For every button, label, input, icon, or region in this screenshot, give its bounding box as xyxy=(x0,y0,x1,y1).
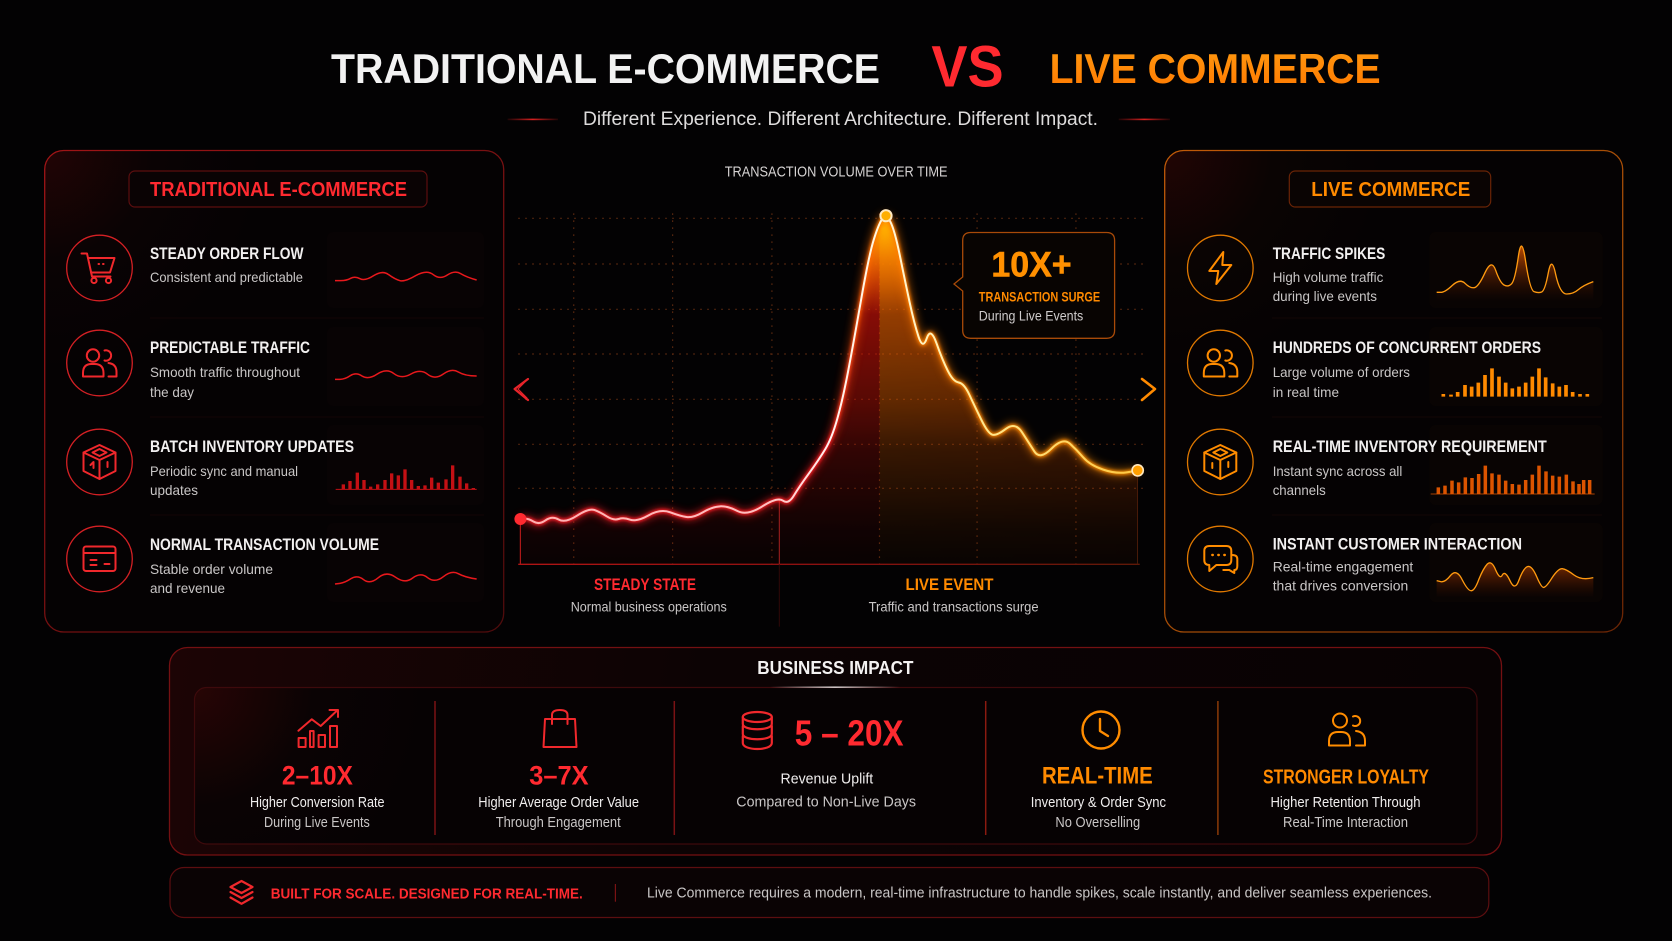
dot: end xyxy=(1132,465,1143,476)
text: real-time inventory requirement: Instant sync across all xyxy=(1273,463,1402,479)
footer banner xyxy=(170,868,1489,918)
metric: real-time: REAL-TIME xyxy=(1042,762,1153,789)
text: normal transaction volume: and revenue xyxy=(150,580,225,596)
label: steady state: STEADY STATE xyxy=(594,576,696,594)
text: tagline: BUILT FOR SCALE. DESIGNED FOR REAL-TIME. xyxy=(271,886,583,902)
bar chart: batch inventory xyxy=(336,465,477,489)
text: hundreds of concurrent orders: in real time xyxy=(1273,384,1339,400)
panel heading: traditional e-commerce xyxy=(129,171,427,207)
panel heading: live commerce: LIVE COMMERCE xyxy=(1311,179,1470,201)
dot: peak xyxy=(880,210,892,221)
dot: start xyxy=(514,513,526,525)
text: predictable traffic xyxy=(150,339,310,400)
axis lines xyxy=(518,471,1140,627)
icon: shopping bag xyxy=(544,710,576,747)
sparkline: steady order flow xyxy=(335,272,477,281)
row: batch inventory updates xyxy=(67,425,484,505)
subtitle: Different Experience. Different Architecture. Different Impact. xyxy=(583,109,1098,130)
label: live event: LIVE EVENT xyxy=(906,576,994,594)
metric: stronger loyalty: Real-Time Interaction xyxy=(1283,815,1408,831)
text: steady order flow xyxy=(150,245,304,285)
bar chart: concurrent orders xyxy=(1443,368,1587,397)
chart grid xyxy=(518,213,1146,564)
text: traffic spikes: TRAFFIC SPIKES xyxy=(1273,245,1385,263)
metric: real-time: No Overselling xyxy=(1055,815,1140,831)
callout: 10x+: 10X+ xyxy=(991,246,1072,285)
text: normal transaction volume xyxy=(150,536,379,596)
panel heading: live commerce xyxy=(1289,171,1491,207)
metric: stronger loyalty: Higher Retention Through xyxy=(1270,795,1420,811)
arrow: left xyxy=(515,379,528,400)
text: batch inventory updates: updates xyxy=(150,482,198,498)
sparkline: predictable traffic xyxy=(335,370,477,379)
header xyxy=(331,35,1381,130)
metric: revenue uplift xyxy=(736,712,916,811)
icon: box xyxy=(67,429,132,495)
text: real-time inventory requirement: REAL-TIME INVENTORY REQUIREMENT xyxy=(1273,438,1547,456)
text: hundreds of concurrent orders xyxy=(1273,339,1541,400)
metric: real-time xyxy=(1031,712,1166,831)
area under curve xyxy=(520,217,1138,564)
text: predictable traffic: Smooth traffic throughout xyxy=(150,364,300,380)
text: batch inventory updates xyxy=(150,438,354,498)
icon: users xyxy=(67,330,132,396)
title: vs: VS xyxy=(931,35,1004,100)
callout: 10x+ xyxy=(954,232,1115,338)
metric: average order value: 3–7X xyxy=(529,760,589,790)
title: live commerce: LIVE COMMERCE xyxy=(1050,45,1381,92)
metric: average order value: Through Engagement xyxy=(496,815,621,831)
text: instant customer interaction: that drives conversion xyxy=(1273,577,1408,593)
sparkline: traffic spikes xyxy=(1437,246,1593,302)
icon: chat bubbles xyxy=(1188,526,1253,592)
icon: layers xyxy=(230,881,252,904)
text: real-time inventory requirement xyxy=(1273,438,1547,498)
text: instant customer interaction: INSTANT CUSTOMER INTERACTION xyxy=(1273,535,1522,553)
row: instant customer interaction xyxy=(1188,523,1603,602)
label: live event: Traffic and transactions surge xyxy=(869,599,1039,615)
icon: shopping cart xyxy=(67,235,132,301)
text: traffic spikes xyxy=(1273,245,1385,304)
metric: average order value xyxy=(478,710,639,831)
text: normal transaction volume: NORMAL TRANSACTION VOLUME xyxy=(150,536,379,554)
row: normal transaction volume xyxy=(67,523,484,602)
text: description: Live Commerce requires a modern, real-time infrastructure to handle spikes, scale instantly, and deliver seamless experiences. xyxy=(647,885,1432,901)
metric: revenue uplift: Revenue Uplift xyxy=(780,771,873,787)
text: batch inventory updates: BATCH INVENTORY UPDATES xyxy=(150,438,354,456)
metric: real-time: Inventory & Order Sync xyxy=(1031,795,1166,811)
sparkline: customer interaction xyxy=(1437,563,1593,597)
icon: box xyxy=(1188,429,1253,495)
metric: revenue uplift: 5 – 20X xyxy=(795,712,904,753)
callout: 10x+: During Live Events xyxy=(979,308,1083,324)
sparkline: normal transaction volume xyxy=(335,572,477,584)
row: real-time inventory requirement xyxy=(1188,425,1603,505)
metric: revenue uplift: Compared to Non-Live Days xyxy=(736,795,916,811)
bar chart: real-time inventory xyxy=(1431,466,1595,494)
panel: live commerce xyxy=(1165,150,1623,632)
arrow: right xyxy=(1142,379,1155,400)
chart: transaction volume over time xyxy=(514,165,1155,627)
chart title: TRANSACTION VOLUME OVER TIME xyxy=(725,165,948,181)
text: steady order flow: Consistent and predictable xyxy=(150,269,303,285)
text: instant customer interaction xyxy=(1273,535,1522,593)
label: steady state xyxy=(571,576,727,615)
metric: conversion rate: During Live Events xyxy=(264,815,370,831)
metric: average order value: Higher Average Order Value xyxy=(478,795,639,811)
icon: clock xyxy=(1082,712,1120,748)
text: instant customer interaction: Real-time engagement xyxy=(1273,559,1413,575)
transaction line xyxy=(520,217,1138,523)
text: traffic spikes: High volume traffic xyxy=(1273,269,1383,285)
row: steady order flow xyxy=(67,232,484,308)
panel heading: traditional e-commerce: TRADITIONAL E-COMMERCE xyxy=(150,179,407,201)
icon: credit card xyxy=(67,526,132,592)
metric: conversion rate: 2–10X xyxy=(282,760,353,790)
text: predictable traffic: the day xyxy=(150,384,194,400)
text: steady order flow: STEADY ORDER FLOW xyxy=(150,245,304,263)
label: live event xyxy=(869,576,1039,615)
metric: stronger loyalty: STRONGER LOYALTY xyxy=(1263,766,1430,788)
line glow inner xyxy=(520,217,1138,523)
line glow xyxy=(520,217,1138,523)
text: hundreds of concurrent orders: Large volume of orders xyxy=(1273,364,1410,380)
icon: growth chart xyxy=(298,710,338,747)
panel: business impact xyxy=(170,648,1502,855)
label: steady state: Normal business operations xyxy=(571,599,727,615)
icon: users xyxy=(1329,714,1365,746)
row: hundreds of concurrent orders xyxy=(1188,327,1603,406)
panel: traditional e-commerce xyxy=(45,150,504,632)
row: traffic spikes xyxy=(1188,232,1603,308)
row: predictable traffic xyxy=(67,327,484,406)
icon: users xyxy=(1188,330,1253,396)
icon: lightning bolt xyxy=(1188,235,1253,301)
text: batch inventory updates: Periodic sync and manual xyxy=(150,463,298,479)
text: predictable traffic: PREDICTABLE TRAFFIC xyxy=(150,339,310,357)
text: traffic spikes: during live events xyxy=(1273,288,1377,304)
icon: database xyxy=(743,712,772,749)
metric: conversion rate: Higher Conversion Rate xyxy=(250,795,384,811)
heading: business impact: BUSINESS IMPACT xyxy=(757,658,913,678)
callout: 10x+: TRANSACTION SURGE xyxy=(979,289,1100,305)
metric: conversion rate xyxy=(250,710,384,831)
text: real-time inventory requirement: channels xyxy=(1273,482,1326,498)
text: normal transaction volume: Stable order volume xyxy=(150,561,273,577)
metric: stronger loyalty xyxy=(1263,714,1430,831)
text: hundreds of concurrent orders: HUNDREDS OF CONCURRENT ORDERS xyxy=(1273,339,1541,357)
title: traditional e-commerce: TRADITIONAL E-COMMERCE xyxy=(331,45,880,92)
